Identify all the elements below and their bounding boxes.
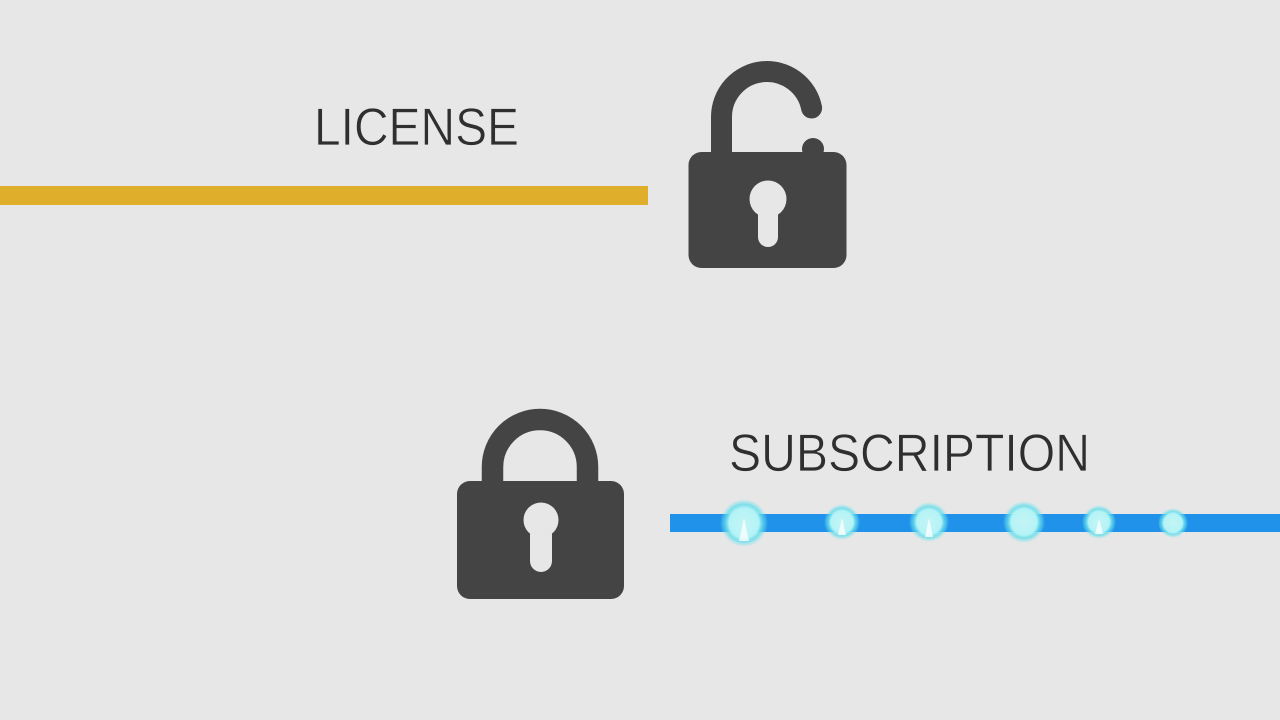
icon: open padlock bbox=[688, 72, 846, 268]
heading: license: LICENSE bbox=[314, 98, 519, 157]
heading: subscription: SUBSCRIPTION bbox=[729, 424, 1090, 483]
bar: license gold bbox=[0, 186, 648, 205]
bar: subscription with glowing data nodes bbox=[670, 499, 1280, 547]
icon: closed padlock bbox=[457, 420, 624, 599]
